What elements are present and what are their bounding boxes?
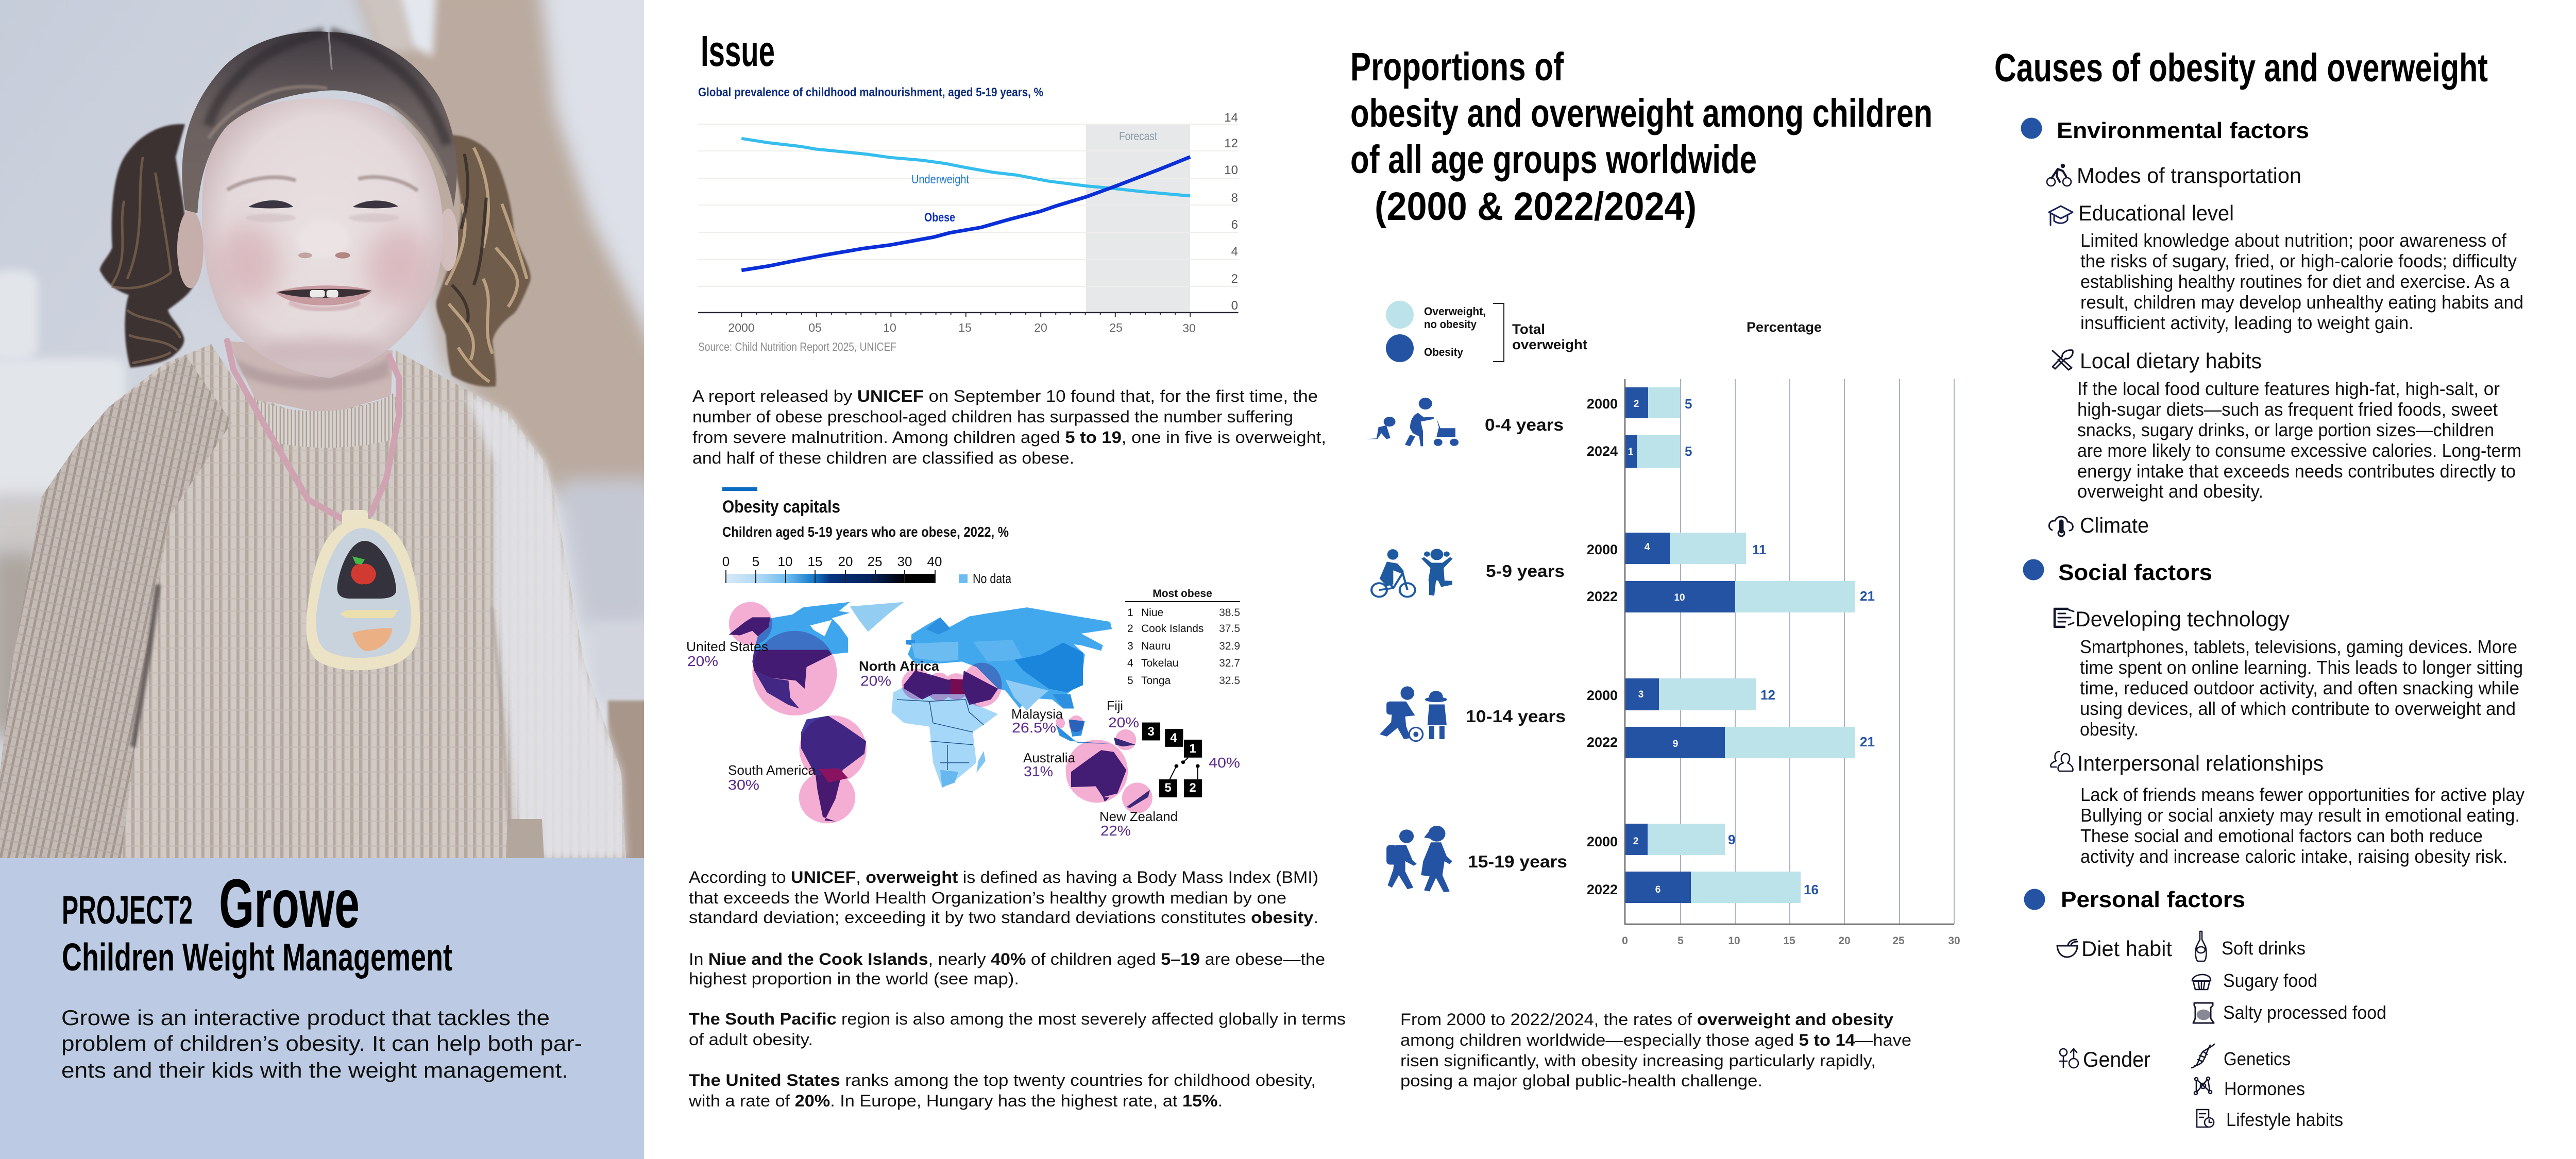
bar chart: overweight and obesity by age group: 2024 xyxy=(1587,444,1618,459)
text: local dietary habits: energy intake that exceeds needs contributes directly to xyxy=(2077,461,2516,482)
item: hormones: Hormones xyxy=(2224,1078,2305,1099)
chart legend: Obesity xyxy=(1424,346,1464,359)
bar chart: overweight and obesity by age group: 0 xyxy=(1622,935,1628,947)
bar chart: overweight and obesity by age group: 15 xyxy=(1783,935,1795,947)
chart legend: Overweight, xyxy=(1424,305,1486,318)
product description: ents and their kids with the weight management. xyxy=(61,1058,568,1082)
item: lifestyle habits: Lifestyle habits xyxy=(2226,1109,2343,1130)
marker numbers: 4 xyxy=(1170,731,1177,745)
heading: PROJECT2 Growe xyxy=(62,865,360,942)
paragraphs: definitions and rankings: highest proportion in the world (see map). xyxy=(689,969,1019,988)
map region labels: Fiji xyxy=(1107,698,1123,713)
marker numbers: 3 xyxy=(1147,725,1155,739)
world map with highlighted regions xyxy=(729,602,1153,823)
icon: clipboard with clock xyxy=(2197,1110,2214,1127)
age label: 15-19 years: 15-19 years xyxy=(1468,852,1567,871)
map legend xyxy=(722,554,1011,586)
bars: 15-19 years xyxy=(1625,824,1819,903)
paragraphs: definitions and rankings: The South Pacific region is also among the most severely affected globally in terms xyxy=(689,1010,1346,1028)
heading: Proportions: (2000 & 2022/2024) xyxy=(1375,184,1697,229)
heading: PROJECT2 Growe: PROJECT2 xyxy=(62,888,193,932)
bullet and heading: Personal factors xyxy=(2061,887,2245,912)
table: most obese xyxy=(1125,588,1240,687)
bar chart: overweight and obesity by age group: 10 xyxy=(1728,935,1740,947)
bar chart: overweight and obesity by age group: 2022 xyxy=(1587,735,1618,750)
chart legend: Total xyxy=(1512,321,1545,337)
bar chart: overweight and obesity by age group: 20 xyxy=(1838,935,1851,947)
right ponytail xyxy=(436,135,531,387)
map region labels: Australia xyxy=(1023,750,1076,765)
bars: 15-19 years: 16 xyxy=(1804,882,1819,897)
map region labels: 20% xyxy=(1108,714,1139,730)
line chart: global prevalence of childhood malnourishment xyxy=(698,86,1239,353)
paragraph: chart takeaway: risen significantly, with obesity increasing particularly rapidly, xyxy=(1400,1051,1876,1070)
bar chart: overweight and obesity by age group: 2000 xyxy=(1587,542,1618,557)
bars: 5-9 years: 21 xyxy=(1860,588,1875,604)
paragraph: chart takeaway: among children worldwide—especially those aged 5 to 14—have xyxy=(1400,1031,1911,1049)
map legend: No data xyxy=(973,571,1011,586)
text: interpersonal relationships: Lack of friends means fewer opportunities for active play xyxy=(2080,784,2524,805)
bars: 0-4 years: 5 xyxy=(1685,396,1692,412)
icon: two people xyxy=(2050,752,2073,771)
bullet and heading: Environmental factors xyxy=(2057,118,2309,143)
face xyxy=(202,98,443,378)
chart legend: overweight xyxy=(1512,337,1587,352)
text: local dietary habits: If the local food culture features high-fat, high-salt, or xyxy=(2077,378,2500,399)
table: most obese: Tokelau xyxy=(1141,657,1178,669)
line chart: global prevalence of childhood malnourishment: 6 xyxy=(1231,218,1238,232)
table: most obese: Nauru xyxy=(1141,640,1171,652)
eyes, brows, nose and smile xyxy=(227,177,418,309)
text: developing technology: time spent on online learning. This leads to longer sitting xyxy=(2080,657,2523,678)
line chart: global prevalence of childhood malnourishment: 0 xyxy=(1231,299,1238,313)
text: developing technology xyxy=(2080,636,2523,740)
paragraphs: definitions and rankings: of adult obesity. xyxy=(689,1030,813,1049)
paragraph: chart takeaway: From 2000 to 2022/2024, the rates of overweight and obesity xyxy=(1400,1010,1893,1029)
text: developing technology: obesity. xyxy=(2080,719,2139,740)
paragraph: chart takeaway xyxy=(1400,1010,1911,1090)
product description: problem of children’s obesity. It can help both par- xyxy=(61,1031,582,1055)
item: sugary food: Sugary food xyxy=(2223,970,2317,991)
map region labels: 20% xyxy=(687,653,718,669)
section: environmental factors xyxy=(2021,117,2523,537)
section: social factors xyxy=(2023,559,2524,867)
paragraph: UNICEF report: A report released by UNICEF on September 10 found that, for the first time, the xyxy=(692,387,1318,405)
panel: causes (right column) xyxy=(1994,46,2524,1130)
pendant device xyxy=(306,510,420,670)
table: most obese: 32.5 xyxy=(1219,675,1240,687)
age label: 10-14 years: 10-14 years xyxy=(1466,707,1566,726)
icon: child cycling and child jumping xyxy=(1371,549,1453,597)
item: educational level: Educational level xyxy=(2078,201,2234,225)
paragraph: UNICEF report: number of obese preschool-aged children has surpassed the number suffering xyxy=(692,407,1293,426)
hair cap xyxy=(182,31,457,213)
table: most obese: 5 xyxy=(1127,675,1133,687)
pacific island markers xyxy=(1142,723,1202,797)
section: personal factors xyxy=(2024,887,2386,1130)
item: modes of transportation: Modes of transportation xyxy=(2077,163,2301,188)
map legend: 0 xyxy=(722,554,730,569)
bars: 5-9 years: 4 xyxy=(1645,542,1650,553)
bars: 0-4 years: 1 xyxy=(1628,447,1634,457)
map region labels: North Africa xyxy=(859,658,940,674)
text: educational level: insufficient activity, leading to weight gain. xyxy=(2080,312,2414,333)
line chart: global prevalence of childhood malnourishment: 2000 xyxy=(728,321,755,334)
item: climate: Climate xyxy=(2080,513,2149,537)
text: local dietary habits: high-sugar diets—such as frequent fried foods, sweet xyxy=(2077,399,2498,420)
map legend: 5 xyxy=(752,554,759,569)
line chart: global prevalence of childhood malnourishment: Source: Child Nutrition Report 2025, UNICEF xyxy=(698,340,896,353)
text: local dietary habits: are more likely to consume excessive calories. Long-term xyxy=(2077,440,2521,461)
table: most obese: Most obese xyxy=(1153,588,1212,600)
icon: baby and toddler xyxy=(1366,398,1459,446)
neck xyxy=(227,341,393,415)
bar chart: overweight and obesity by age group: 25 xyxy=(1892,935,1905,947)
text: educational level: establishing healthy routines for diet and exercise. As a xyxy=(2080,271,2510,292)
text: local dietary habits xyxy=(2077,378,2521,502)
paragraph: chart takeaway: posing a major global public-health challenge. xyxy=(1400,1071,1762,1090)
bars: 10-14 years: 9 xyxy=(1673,739,1678,749)
paragraphs: definitions and rankings: In Niue and the Cook Islands , nearly 40% of children aged 5–19 are obese—the xyxy=(689,950,1325,968)
table: most obese: 3 xyxy=(1127,640,1133,652)
heading: Proportions: obesity and overweight among children xyxy=(1350,91,1933,135)
map region labels: 40% xyxy=(1209,755,1240,771)
icon: bowl xyxy=(2057,940,2077,957)
paragraph: UNICEF report: from severe malnutrition. Among children aged 5 to 19, one in five is overweight, xyxy=(692,428,1326,447)
heading: Proportions xyxy=(1350,45,1933,229)
bullet and heading: Social factors xyxy=(2058,560,2212,585)
sweater right sleeve highlight xyxy=(464,391,626,858)
marker numbers: 1 xyxy=(1189,742,1196,756)
map region labels: 31% xyxy=(1024,763,1053,779)
icon: bottle xyxy=(2196,931,2206,961)
map legend: 20 xyxy=(838,554,853,569)
paragraph: UNICEF report: and half of these children are classified as obese. xyxy=(692,449,1074,467)
map region labels xyxy=(686,639,1240,839)
line chart: global prevalence of childhood malnourishment: 10 xyxy=(1224,163,1238,177)
child head, hair and neck xyxy=(100,31,531,448)
text: local dietary habits: snacks, sugary drinks, or large portion sizes—children xyxy=(2077,419,2494,440)
bar chart: overweight and obesity by age group: 2022 xyxy=(1587,589,1618,604)
bars: 15-19 years: 6 xyxy=(1655,884,1660,895)
map heading: Obesity capitals: Obesity capitals xyxy=(722,497,840,517)
necklace cord xyxy=(227,341,399,519)
line chart: global prevalence of childhood malnourishment: 14 xyxy=(1224,111,1238,125)
table: most obese: 4 xyxy=(1127,657,1133,669)
line chart: global prevalence of childhood malnourishment: 12 xyxy=(1224,137,1238,150)
text: interpersonal relationships xyxy=(2080,784,2524,867)
marker numbers xyxy=(1147,725,1196,795)
bar chart: overweight and obesity by age group xyxy=(1587,379,1960,947)
item: interpersonal relationships: Interpersonal relationships xyxy=(2077,751,2324,775)
line chart: global prevalence of childhood malnourishment: 10 xyxy=(883,321,896,334)
line chart: global prevalence of childhood malnourishment: 4 xyxy=(1231,245,1238,259)
photo: smiling child wearing the Growe pendant xyxy=(0,0,665,865)
map legend: 25 xyxy=(868,554,882,569)
map region labels: South America xyxy=(728,762,816,778)
underweight line xyxy=(741,139,1190,196)
text: developing technology: Smartphones, tablets, televisions, gaming devices. More xyxy=(2080,636,2517,657)
left ponytail xyxy=(100,124,194,368)
line chart: global prevalence of childhood malnourishment: 25 xyxy=(1109,321,1123,334)
age label: 5-9 years: 5-9 years xyxy=(1486,561,1565,581)
subheading: Children Weight Management xyxy=(62,935,452,979)
item: salty processed food: Salty processed food xyxy=(2223,1002,2386,1023)
line chart: global prevalence of childhood malnourishment: Global prevalence of childhood malnourishment, aged 5-19 years, % xyxy=(698,86,1043,99)
table: most obese: 2 xyxy=(1127,623,1133,635)
item: soft drinks: Soft drinks xyxy=(2222,938,2306,959)
map region labels: New Zealand xyxy=(1099,809,1178,824)
text: interpersonal relationships: Bullying or social anxiety may result in emotional eating. xyxy=(2080,805,2520,826)
line chart: global prevalence of childhood malnourishment: 05 xyxy=(808,321,822,334)
ears xyxy=(177,210,204,288)
highlight circles xyxy=(729,602,1153,823)
map legend: 30 xyxy=(897,554,912,569)
bars: 0-4 years: 2 xyxy=(1634,399,1639,410)
table: most obese: 37.5 xyxy=(1219,623,1240,635)
marker numbers: 5 xyxy=(1164,781,1172,795)
bar chart: overweight and obesity by age group: 30 xyxy=(1948,935,1960,947)
map region labels: 30% xyxy=(728,777,759,793)
paragraphs: definitions and rankings: The United States ranks among the top twenty countries for childhood obesity, xyxy=(689,1071,1316,1089)
bar chart: overweight and obesity by age group: 2022 xyxy=(1587,882,1618,897)
icon: graduation cap xyxy=(2049,206,2073,225)
line chart: global prevalence of childhood malnourishment: 20 xyxy=(1034,321,1047,334)
sweater xyxy=(0,344,626,858)
map legend: 40 xyxy=(927,554,942,569)
icon: DNA helix xyxy=(2192,1044,2214,1068)
product description xyxy=(61,1005,582,1082)
table: most obese: 32.7 xyxy=(1219,657,1240,669)
item: developing technology: Developing technology xyxy=(2075,607,2290,631)
line chart: global prevalence of childhood malnourishment: Underweight xyxy=(911,173,969,186)
map region labels: 20% xyxy=(860,673,891,689)
heading: PROJECT2 Growe: Growe xyxy=(219,865,360,942)
table: most obese: 38.5 xyxy=(1219,607,1240,619)
line chart: global prevalence of childhood malnourishment: Obese xyxy=(924,211,955,225)
item: genetics: Genetics xyxy=(2224,1048,2291,1069)
paragraph: UNICEF report xyxy=(692,387,1326,467)
bar chart: overweight and obesity by age group: 2000 xyxy=(1587,688,1618,703)
chart legend: no obesity xyxy=(1424,318,1477,331)
icon: cyclist xyxy=(2047,164,2071,186)
item: diet habit: Diet habit xyxy=(2081,936,2172,961)
bars: 0-4 years xyxy=(1625,387,1692,468)
paragraphs: definitions and rankings: that exceeds the World Health Organization’s healthy growth median by one xyxy=(689,889,1286,907)
bars: 10-14 years: 21 xyxy=(1860,734,1875,749)
icon: child with football and child reading xyxy=(1380,686,1447,741)
paragraphs: definitions and rankings: standard deviation; exceeding it by two standard deviations constitutes obesity . xyxy=(689,908,1318,927)
panel: issue (second column) xyxy=(686,27,1346,1110)
text: interpersonal relationships: These social and emotional factors can both reduce xyxy=(2080,825,2483,846)
bar chart: overweight and obesity by age group: 5 xyxy=(1677,935,1684,947)
bars: 5-9 years: 10 xyxy=(1674,592,1685,603)
panel background xyxy=(0,0,644,1159)
text: developing technology: using devices, all of which contribute to overweight and xyxy=(2080,698,2516,719)
bars: 5-9 years: 11 xyxy=(1752,542,1766,557)
table: most obese: 32.9 xyxy=(1219,640,1240,652)
product description: Growe is an interactive product that tackles the xyxy=(61,1005,550,1030)
obese line xyxy=(741,157,1190,270)
map region labels: Malaysia xyxy=(1011,706,1063,722)
forecast band xyxy=(1086,124,1190,313)
sweater left sleeve xyxy=(0,355,232,858)
heading: Proportions: Proportions of xyxy=(1350,45,1564,89)
map region labels: 26.5% xyxy=(1012,720,1056,736)
bars: 0-4 years: 5 xyxy=(1685,444,1692,459)
map heading: Obesity capitals: Children aged 5-19 years who are obese, 2022, % xyxy=(722,524,1009,540)
sweater collar xyxy=(255,393,397,448)
line chart: global prevalence of childhood malnourishment: 2 xyxy=(1231,272,1238,286)
bar chart: overweight and obesity by age group: 2000 xyxy=(1587,396,1618,412)
panel: proportions chart (third column) xyxy=(1350,45,1960,1090)
panel: project intro (left column) xyxy=(0,0,665,1159)
text: developing technology: time, reduced outdoor activity, and often snacking while xyxy=(2080,677,2519,698)
map region labels: United States xyxy=(686,639,768,654)
line chart: global prevalence of childhood malnourishment: Forecast xyxy=(1119,129,1157,143)
text: educational level: result, children may develop unhealthy eating habits and xyxy=(2080,292,2523,313)
icon: fork and knife xyxy=(2053,350,2073,370)
text: educational level: the risks of sugary, fried, or high-calorie foods; difficulty xyxy=(2080,250,2517,271)
icon: snack bag xyxy=(2193,1003,2214,1023)
bars: 10-14 years xyxy=(1625,678,1875,758)
map legend: 10 xyxy=(778,554,792,569)
line chart: global prevalence of childhood malnourishment: 15 xyxy=(958,321,972,334)
map legend: 15 xyxy=(808,554,822,569)
icon: gender symbols xyxy=(2060,1049,2078,1068)
item: gender: Gender xyxy=(2083,1047,2150,1071)
bars: 5-9 years xyxy=(1625,533,1875,612)
map region labels: 22% xyxy=(1100,823,1131,839)
paragraphs: definitions and rankings xyxy=(688,868,1346,1110)
bars: 15-19 years: 2 xyxy=(1633,836,1638,847)
heading: Proportions: of all age groups worldwide xyxy=(1350,138,1757,182)
age label: 0-4 years: 0-4 years xyxy=(1485,415,1564,434)
bars: 10-14 years: 3 xyxy=(1638,689,1643,700)
table: most obese: Cook Islands xyxy=(1141,623,1204,635)
chart legend xyxy=(1386,301,1822,362)
icon: technology document xyxy=(2055,609,2074,627)
line chart: global prevalence of childhood malnourishment: 8 xyxy=(1231,191,1238,205)
map heading: Obesity capitals xyxy=(722,487,1009,540)
text: educational level: Limited knowledge about nutrition; poor awareness of xyxy=(2080,230,2507,251)
bars: 10-14 years: 12 xyxy=(1760,687,1775,703)
text: interpersonal relationships: activity and increase caloric intake, raising obesity risk. xyxy=(2080,846,2507,867)
table: most obese: Niue xyxy=(1141,607,1163,619)
line chart: global prevalence of childhood malnourishment: 30 xyxy=(1182,321,1196,335)
paragraphs: definitions and rankings: with a rate of 20%. In Europe, Hungary has the highest rate, at 15%. xyxy=(688,1092,1223,1110)
icon: molecule xyxy=(2194,1077,2212,1095)
text: educational level xyxy=(2080,230,2523,333)
icon: cloud and thermometer xyxy=(2049,517,2073,536)
paragraphs: definitions and rankings: According to UNICEF, overweight is defined as having a Body Mass Index (BMI) xyxy=(689,868,1318,887)
marker numbers: 2 xyxy=(1189,781,1196,795)
icon: two teenagers walking with bags xyxy=(1386,826,1452,892)
text: local dietary habits: overweight and obesity. xyxy=(2077,481,2263,502)
heading: Issue: Issue xyxy=(701,27,775,75)
table: most obese: Tonga xyxy=(1141,675,1171,687)
icon: muffin xyxy=(2192,975,2211,990)
item: local dietary habits: Local dietary habits xyxy=(2080,349,2262,373)
bar chart: overweight and obesity by age group: 2000 xyxy=(1587,834,1618,849)
table: most obese: 1 xyxy=(1127,607,1133,619)
bars: 15-19 years: 9 xyxy=(1728,832,1735,847)
chart legend: Percentage xyxy=(1747,319,1822,335)
